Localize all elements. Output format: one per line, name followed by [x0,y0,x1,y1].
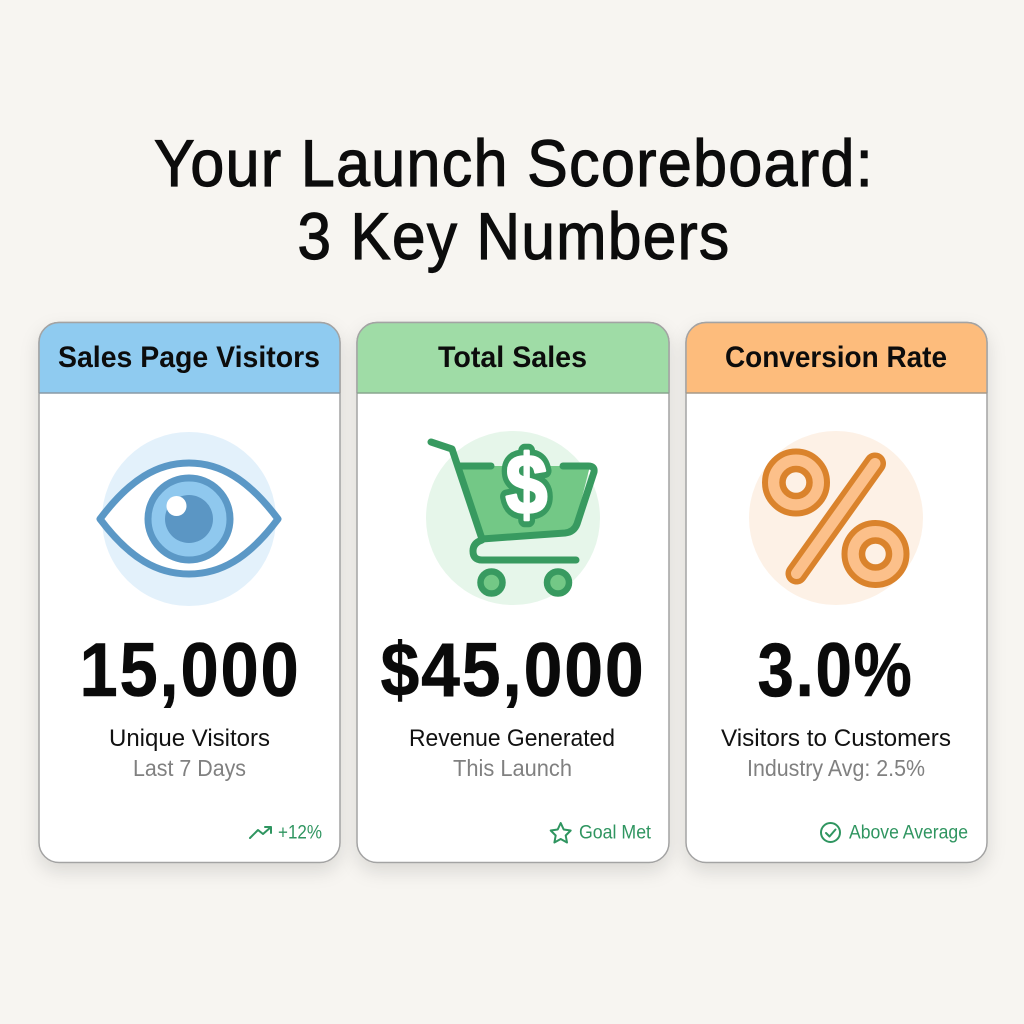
panel: total sales [357,322,669,862]
icon: shopping cart with dollar sign [426,431,600,605]
metric: $45,000: $45,000 [380,628,646,713]
header: sales page visitors: Sales Page Visitors [58,341,320,374]
icon: percent sign [749,431,923,605]
label: visitors to customers: Visitors to Customers [721,725,951,752]
header: sales page visitors [38,322,341,394]
icon: dollar sign: $ [506,438,547,531]
header: total sales: Total Sales [438,341,587,374]
badge: goal met [551,822,652,844]
header: total sales [356,322,670,394]
badge: above average: Above Average [849,822,968,844]
icon: dollar sign: $ [506,438,547,531]
sublabel: this launch: This Launch [453,755,572,781]
badge: +12% [250,822,322,844]
metric: 15,000: 15,000 [80,628,300,713]
badge: goal met: Goal Met [579,822,652,844]
label: unique visitors: Unique Visitors [109,725,270,752]
panel: conversion rate [686,322,987,862]
header: conversion rate: Conversion Rate [725,341,947,374]
title: Your Launch Scoreboard: [154,126,874,200]
sublabel: last 7 days: Last 7 Days [133,755,246,781]
metric: 3.0%: 3.0% [758,628,914,713]
panel: sales page visitors [39,322,340,862]
header: conversion rate [685,322,988,394]
title [154,126,874,273]
icon: eye [100,432,278,606]
sublabel: industry average: Industry Avg: 2.5% [747,755,925,781]
badge: +12%: +12% [278,822,322,844]
label: revenue generated: Revenue Generated [409,725,615,752]
title: 3 Key Numbers [298,199,730,273]
